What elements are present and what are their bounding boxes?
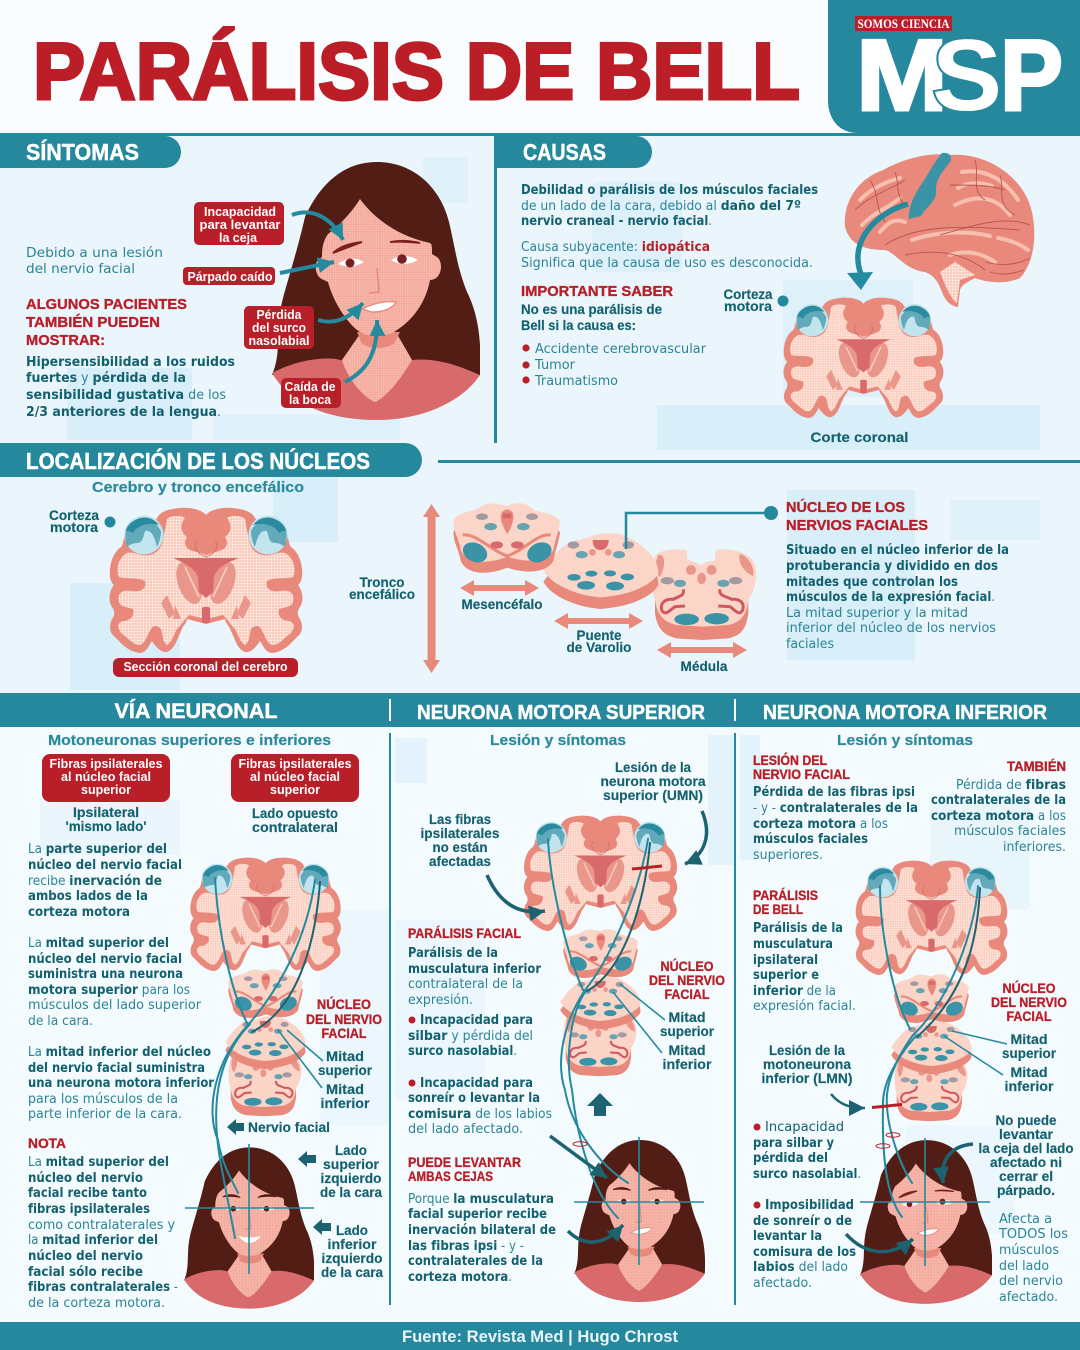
text: también: músculos faciales [954, 824, 1066, 839]
text: núcleo de los nervios faciales: Situado en el núcleo inferior de la [786, 543, 1009, 558]
text: nota: fibras ipsilaterales [28, 1202, 150, 1217]
logo: MSP Somos Ciencia: S [932, 20, 1002, 132]
lesion marker [872, 1104, 902, 1148]
label: fibras ipsilaterales: ipsilaterales [420, 825, 500, 841]
logo: MSP Somos Ciencia: M [856, 20, 948, 132]
text: importante saber: Accidente cerebrovascular [535, 342, 707, 357]
footer: fuente: Fuente: Revista Med | Hugo Chrost [402, 1327, 678, 1346]
label: núcleo del nervio facial: DEL NERVIO [991, 994, 1067, 1010]
label: fibras ipsilaterales: no están [432, 839, 488, 855]
callout: fibras ipsilaterales right [231, 754, 359, 802]
label: lado superior [298, 1142, 382, 1200]
callout: párpado: Párpado caído [188, 269, 273, 284]
text: afecta a todos: músculos [999, 1243, 1059, 1258]
text: algunos pacientes: fuertes y pérdida de la [26, 371, 186, 386]
arrows [831, 1094, 973, 1252]
label: mitades: inferior [1004, 1078, 1054, 1094]
text: parálisis facial: Parálisis de la [408, 946, 498, 961]
text: incapacidad sonreír: sonreír o levantar la [408, 1091, 540, 1106]
text: mitad inferior: La mitad inferior del núcleo [28, 1045, 211, 1060]
text: incapacidad silbar: surco nasolabial. [753, 1167, 861, 1182]
text: afecta a todos: del nervio [999, 1274, 1063, 1289]
label: no puede levantar: No puede [996, 1112, 1057, 1128]
callout: fibras ipsilaterales left: superior [81, 782, 131, 797]
text: puede levantar ambas cejas: inervación bilateral de [408, 1223, 556, 1238]
label: fibras ipsilaterales: Las fibras [429, 811, 491, 827]
text: nota: como contralaterales y [28, 1218, 175, 1233]
text: parte superior: La parte superior del [28, 842, 167, 857]
text: incapacidad sonreír: del lado afectado. [408, 1122, 523, 1137]
text: parálisis de bell: superior e [753, 968, 819, 983]
text: parálisis facial: PARÁLISIS FACIAL [408, 926, 521, 941]
illustration: coronal brain [784, 298, 943, 418]
text: imposibilidad sonreír [753, 1198, 856, 1291]
label: mitades: Mitad [1010, 1064, 1048, 1080]
text: nota: la mitad inferior del [28, 1233, 158, 1248]
panel: vía neuronal [28, 732, 383, 1311]
label: mitades [278, 1030, 373, 1111]
text: importante saber: Traumatismo [534, 374, 618, 389]
label: mitades: superior [1002, 1045, 1057, 1061]
label: lado inferior: inferior [328, 1236, 377, 1252]
text: imposibilidad sonreír: afectado. [753, 1276, 812, 1291]
text: algunos pacientes: MOSTRAR: [26, 332, 105, 349]
label: núcleo del nervio facial [306, 995, 382, 1041]
illustration: woman [574, 1140, 705, 1302]
illustration: woman with droop [272, 162, 480, 420]
label: lesión UMN: superior (UMN) [603, 787, 703, 803]
label: fibras ipsilaterales [420, 811, 500, 869]
text: nota [28, 1135, 178, 1311]
text: imposibilidad sonreír: labios del lado [753, 1260, 848, 1275]
face axes [860, 1138, 990, 1266]
text: incapacidad silbar: silbar y pérdida del [408, 1029, 533, 1044]
label: mitades: superior [660, 1023, 715, 1039]
illustration: woman [860, 1140, 992, 1304]
label: no puede levantar: párpado. [997, 1182, 1055, 1198]
text: parte superior [28, 842, 182, 920]
text: puede levantar ambas cejas: PUEDE LEVANTAR [408, 1155, 521, 1170]
panel: neurona motora inferior [753, 732, 1074, 1305]
face axes [185, 1144, 314, 1274]
label: lado superior: superior [323, 1156, 380, 1172]
label: núcleo del nervio facial: NÚCLEO [660, 957, 714, 974]
text: importante saber: Bell si la causa es: [521, 317, 636, 333]
text: parálisis facial [408, 926, 542, 1008]
panel: causas [497, 136, 1034, 445]
labels under callouts: 'mismo lado' [66, 818, 146, 834]
text: puede levantar ambas cejas: AMBAS CEJAS [408, 1169, 493, 1184]
label: lado inferior: Lado [336, 1222, 368, 1238]
callout: fibras ipsilaterales right: Fibras ipsilaterales [238, 756, 352, 771]
text: debido a lesión [26, 246, 163, 277]
text: afecta a todos: Afecta a [999, 1212, 1052, 1227]
text: importante saber: Tumor [534, 358, 576, 373]
text: algunos pacientes: Hipersensibilidad a los ruidos [26, 355, 235, 370]
label: no puede levantar: levantar [999, 1126, 1054, 1142]
text: algunos pacientes [26, 296, 235, 420]
text: algunos pacientes: TAMBIÉN PUEDEN [26, 314, 160, 331]
text: parálisis de bell [753, 888, 856, 1014]
callout: ceja: para levantar [200, 217, 280, 232]
text: parte superior: corteza motora [28, 905, 130, 920]
label: lesión UMN: Lesión de la [615, 759, 691, 775]
text: nota: facial recibe tanto [28, 1186, 147, 1201]
top teal rule [0, 133, 1080, 136]
callout: fibras ipsilaterales right: al núcleo facial [250, 769, 340, 784]
text: parálisis facial: musculatura inferior [408, 962, 542, 977]
text: debilidad: Debilidad o parálisis de los músculos faciales [521, 183, 818, 198]
text: también: inferiores. [1003, 840, 1066, 855]
label: corteza motora [724, 286, 788, 314]
text: parálisis de bell: PARÁLISIS [753, 888, 818, 903]
labels under callouts: Lado opuesto [252, 805, 338, 821]
label: mitades [944, 1031, 1057, 1094]
label: núcleo del nervio facial: FACIAL [1006, 1008, 1052, 1024]
illustration: coronal brain [110, 508, 302, 653]
label: no puede levantar: afectado ni [990, 1154, 1062, 1170]
logo: MSP Somos Ciencia: SOMOS CIENCIA [858, 16, 950, 31]
text: lesión del nervio facial: superiores. [753, 848, 823, 863]
text: incapacidad silbar: surco nasolabial. [408, 1044, 517, 1059]
nerve fibres [548, 839, 650, 1218]
text: mitad inferior: una neurona motora inferior [28, 1076, 215, 1091]
text: nota: La mitad superior del [28, 1155, 169, 1170]
callout: fibras ipsilaterales left: Fibras ipsilaterales [50, 756, 162, 771]
divider síntomas/causas [494, 136, 497, 443]
nerve fibres [880, 886, 980, 1217]
label: mitades: inferior [662, 1056, 712, 1072]
text: parálisis de bell: DE BELL [753, 902, 803, 917]
text: lesión del nervio facial: NERVIO FACIAL [753, 767, 850, 782]
logo: MSP Somos Ciencia [828, 0, 1080, 133]
illustration: brain and stem [524, 816, 677, 1076]
text: mitad inferior: para los músculos de la [28, 1092, 178, 1107]
text: núcleo de los nervios faciales: faciales [786, 637, 834, 652]
illustration: lateral brain [845, 153, 1034, 307]
text: núcleo de los nervios faciales [786, 498, 1009, 652]
text: nota: núcleo del nervio [28, 1171, 143, 1186]
text: también: corteza motora a los [931, 809, 1066, 824]
labels under callouts [66, 804, 338, 835]
text: núcleo de los nervios faciales: músculos de la expresión facial. [786, 590, 995, 605]
text: parte superior: núcleo del nervio facial [28, 858, 182, 873]
label: lado superior: de la cara [320, 1184, 382, 1200]
callout: surco [244, 306, 314, 349]
text: nota: facial sólo recibe [28, 1265, 143, 1280]
label: lesión UMN [600, 759, 706, 803]
label: mitades [613, 984, 715, 1072]
panel: neurona motora superior [408, 732, 725, 1302]
text: debilidad: Causa subyacente: idiopática [521, 240, 710, 255]
text: debido a lesión: del nervio facial [26, 262, 135, 277]
arrows and labels: brainstem parts: Médula [680, 658, 728, 674]
text: lesión del nervio facial: Pérdida de las fibras ipsi [753, 785, 915, 800]
text: incapacidad silbar [753, 1120, 861, 1182]
label: lesión LMN: inferior (LMN) [762, 1070, 852, 1086]
label: tronco encefálico: encefálico [349, 586, 415, 602]
text: parálisis de bell: inferior de la [753, 984, 836, 999]
text: mitad inferior [28, 1045, 215, 1122]
text: nota: de la corteza motora. [28, 1296, 165, 1311]
label: mitades: Mitad [668, 1042, 706, 1058]
text: mitad superior: núcleo del nervio facial [28, 952, 182, 967]
illustration: brainstem pieces [453, 503, 756, 640]
text: imposibilidad sonreír: Imposibilidad [765, 1198, 854, 1213]
label: mitades: Mitad [668, 1009, 706, 1025]
label: corteza motora: motora [50, 519, 98, 535]
text: incapacidad silbar: pérdida del [753, 1151, 828, 1166]
callout: boca: la boca [289, 392, 332, 407]
subtitle: Lesión y síntomas [837, 732, 973, 749]
label: corteza motora [49, 507, 116, 535]
illustration: brain and stem [190, 858, 341, 1116]
section bar: NEURONA MOTORA INFERIOR [763, 702, 1048, 724]
label: núcleo del nervio facial: FACIAL [322, 1025, 367, 1041]
text: debilidad: de un lado de la cara, debido al daño del 7º [521, 199, 801, 214]
illustration: woman [184, 1147, 314, 1309]
callout: surco: nasolabial [248, 333, 310, 348]
panel: localización de los núcleos [0, 443, 1080, 677]
heading: causas: CAUSAS [523, 139, 606, 165]
text: incapacidad silbar [408, 1013, 533, 1059]
text: imposibilidad sonreír: de sonreír o de [753, 1214, 852, 1229]
face axes [574, 1137, 704, 1265]
label: lesión UMN: neurona motora [600, 773, 706, 789]
text: núcleo de los nervios faciales: mitades que controlan los [786, 575, 958, 590]
text: nota: núcleo del nervio [28, 1249, 143, 1264]
text: debilidad [521, 183, 818, 271]
text: nota: fibras contralaterales - [28, 1280, 178, 1295]
text: mitad superior [28, 936, 202, 1029]
text: también: contralaterales de la [931, 793, 1066, 808]
connector to facial nucleus [626, 506, 778, 549]
text: mitad superior: motora superior para los [28, 983, 190, 998]
label: mitades: superior [318, 1062, 373, 1078]
heading: causas [497, 136, 652, 168]
label: lado superior: Lado [335, 1142, 367, 1158]
text: afecta a todos: TODOS los [998, 1227, 1068, 1242]
arrows and labels: brainstem parts: Puente [576, 627, 622, 643]
label: núcleo del nervio facial: FACIAL [664, 986, 710, 1002]
text: mitad superior: suministra una neurona [28, 967, 183, 982]
lesion marker [573, 866, 662, 1146]
text: afecta a todos: afectado. [999, 1290, 1058, 1305]
label: lado superior: izquierdo [320, 1170, 382, 1186]
text: incapacidad silbar: Incapacidad para [420, 1013, 533, 1028]
text: lesión del nervio facial: - y - contralaterales de la [753, 801, 918, 816]
label: núcleo del nervio facial: DEL NERVIO [306, 1011, 382, 1027]
text: debilidad: nervio craneal - nervio facial. [521, 214, 712, 229]
text: importante saber: IMPORTANTE SABER [521, 283, 673, 300]
label: lesión LMN: motoneurona [763, 1056, 851, 1072]
text: también: TAMBIÉN [1007, 759, 1066, 774]
label: corteza motora: motora [724, 298, 772, 314]
text: núcleo de los nervios faciales: NERVIOS FACIALES [786, 517, 928, 534]
callout: ceja [194, 202, 284, 245]
text: incapacidad silbar: Incapacidad [765, 1120, 844, 1135]
callout: fibras ipsilaterales left: al núcleo facial [61, 769, 151, 784]
subtitle: Lesión y síntomas [490, 732, 626, 749]
text: puede levantar ambas cejas: Porque la musculatura [408, 1192, 554, 1207]
label: mitades: inferior [320, 1095, 370, 1111]
callout: ceja: Incapacidad [204, 204, 276, 219]
illustration: brain and stem [856, 861, 1007, 1121]
text: incapacidad silbar: para silbar y [753, 1136, 834, 1151]
label: corteza motora: Corteza [724, 286, 773, 302]
text: imposibilidad sonreír: comisura de los [753, 1245, 856, 1260]
text: nota: NOTA [28, 1135, 66, 1151]
callout: fibras ipsilaterales left [42, 754, 170, 802]
text: puede levantar ambas cejas: contralaterales de la [408, 1254, 543, 1269]
text: parte superior: ambos lados de la [28, 889, 148, 904]
callout: surco: Pérdida [256, 307, 302, 322]
label: lado inferior [313, 1219, 383, 1280]
text: núcleo de los nervios faciales: inferior del núcleo de los nervios [786, 621, 996, 636]
text: núcleo de los nervios faciales: NÚCLEO DE LOS [786, 498, 905, 516]
label: mitades: Mitad [1010, 1031, 1048, 1047]
text: parálisis de bell: Parálisis de la [753, 921, 843, 936]
rule [438, 460, 1080, 463]
label: corte coronal: Corte coronal [810, 429, 908, 445]
label: núcleo del nervio facial: NÚCLEO [317, 995, 371, 1012]
section bar: NEURONA MOTORA SUPERIOR [417, 702, 706, 724]
text: algunos pacientes: sensibilidad gustativa de los [26, 388, 226, 403]
label: sección coronal: Sección coronal del cerebro [124, 659, 288, 674]
arrow: vertical [423, 504, 440, 673]
text: también: Pérdida de fibras [956, 778, 1066, 793]
arrows: symptoms [280, 212, 377, 382]
label: fibras ipsilaterales: afectadas [429, 853, 491, 869]
callout: ceja: la ceja [219, 230, 258, 245]
nerve fibres [212, 878, 320, 1238]
text: incapacidad sonreír: comisura de los labios [408, 1107, 552, 1122]
labels under callouts: Ipsilateral [73, 804, 139, 820]
text: núcleo de los nervios faciales: protuberancia y dividido en dos [786, 559, 998, 574]
text: parálisis facial: contralateral de la [408, 977, 523, 992]
text: importante saber: No es una parálisis de [521, 301, 662, 317]
label: núcleo del nervio facial [649, 957, 725, 1002]
text: parálisis de bell: expresión facial. [753, 999, 856, 1014]
text: parte superior: recibe inervación de [28, 874, 162, 889]
panel: síntomas [0, 136, 480, 420]
label: no puede levantar [978, 1112, 1074, 1198]
arrows and labels: brainstem parts: de Varolio [566, 639, 632, 655]
label: núcleo del nervio facial: NÚCLEO [1002, 979, 1056, 996]
callout: surco: del surco [252, 320, 306, 335]
label: no puede levantar: cerrar el [999, 1168, 1053, 1184]
heading: síntomas: SÍNTOMAS [26, 138, 139, 165]
text: mitad superior: La mitad superior del [28, 936, 169, 951]
arrow: brain to section [858, 204, 908, 274]
text: debido a lesión: Debido a una lesión [26, 246, 163, 261]
text: mitad superior: de la cara. [28, 1014, 93, 1029]
text: afecta a todos: del lado [999, 1259, 1049, 1274]
text: mitad superior: músculos del lado superior [28, 998, 202, 1013]
text: puede levantar ambas cejas: corteza motora. [408, 1270, 512, 1285]
arrows [487, 811, 707, 1242]
text: puede levantar ambas cejas: facial superior recibe [408, 1207, 547, 1222]
text: importante saber [521, 283, 707, 389]
text: puede levantar ambas cejas [408, 1155, 556, 1285]
text: afecta a todos [998, 1212, 1068, 1305]
arrow head [847, 272, 873, 290]
label: mitades: Mitad [326, 1048, 364, 1064]
subtitle: Motoneuronas superiores e inferiores [48, 732, 331, 749]
text: incapacidad sonreír [408, 1076, 552, 1137]
text: parálisis de bell: musculatura [753, 937, 833, 952]
label: mitades: Mitad [326, 1081, 364, 1097]
label: lado inferior: izquierdo [322, 1250, 382, 1266]
label: tronco encefálico [349, 574, 415, 602]
label: núcleo del nervio facial [991, 979, 1067, 1024]
arrows and labels: brainstem parts: Mesencéfalo [462, 596, 542, 612]
label: núcleo del nervio facial: DEL NERVIO [649, 972, 725, 988]
text: lesión del nervio facial: corteza motora a los [753, 817, 888, 832]
text: debilidad: Significa que la causa de uso es desconocida. [521, 256, 813, 271]
text: también [931, 759, 1066, 855]
heading: síntomas [0, 136, 181, 168]
text: lesión del nervio facial: músculos faciales [753, 832, 868, 847]
text: algunos pacientes: ALGUNOS PACIENTES [26, 296, 187, 313]
logo: MSP Somos Ciencia: P [1000, 20, 1063, 132]
text: mitad inferior: del nervio facial suministra [28, 1061, 205, 1076]
text: puede levantar ambas cejas: las fibras ipsi - y - [408, 1239, 524, 1254]
section bar: VÍA NEURONAL [114, 700, 278, 723]
label: tronco encefálico: Tronco [360, 574, 404, 590]
label: lesión LMN: Lesión de la [769, 1042, 845, 1058]
section bar [0, 693, 1080, 727]
labels under callouts: contralateral [252, 819, 338, 835]
label: lado inferior: de la cara [321, 1264, 383, 1280]
text: lesión del nervio facial [753, 753, 918, 863]
label: nervio facial: Nervio facial [248, 1119, 330, 1135]
text: incapacidad sonreír: Incapacidad para [420, 1076, 533, 1091]
column dividers [389, 733, 736, 1305]
label: no puede levantar: la ceja del lado [978, 1140, 1074, 1156]
callout: fibras ipsilaterales right: superior [270, 782, 320, 797]
text: lesión del nervio facial: LESIÓN DEL [753, 753, 827, 768]
text: algunos pacientes: 2/3 anteriores de la lengua. [26, 405, 221, 420]
title: PARÁLISIS DE BELL [33, 27, 800, 117]
arrows and labels: brainstem parts [460, 580, 747, 674]
heading: localización [0, 443, 422, 477]
callout: boca [281, 378, 341, 408]
text: mitad inferior: parte inferior de la cara. [28, 1107, 182, 1122]
text: imposibilidad sonreír: levantar la [753, 1229, 822, 1244]
label: corteza motora: Corteza [49, 507, 99, 523]
footer: fuente [0, 1322, 1080, 1350]
label: lesión LMN [762, 1042, 852, 1086]
callout: boca: Caída de [284, 379, 336, 394]
text: núcleo de los nervios faciales: La mitad superior y la mitad [786, 606, 968, 621]
text: parálisis facial: expresión. [408, 993, 473, 1008]
text: parálisis de bell: ipsilateral [753, 953, 818, 968]
subtitle: Cerebro y tronco encefálico [92, 479, 304, 496]
heading: localización: LOCALIZACIÓN DE LOS NÚCLEOS [26, 447, 370, 474]
